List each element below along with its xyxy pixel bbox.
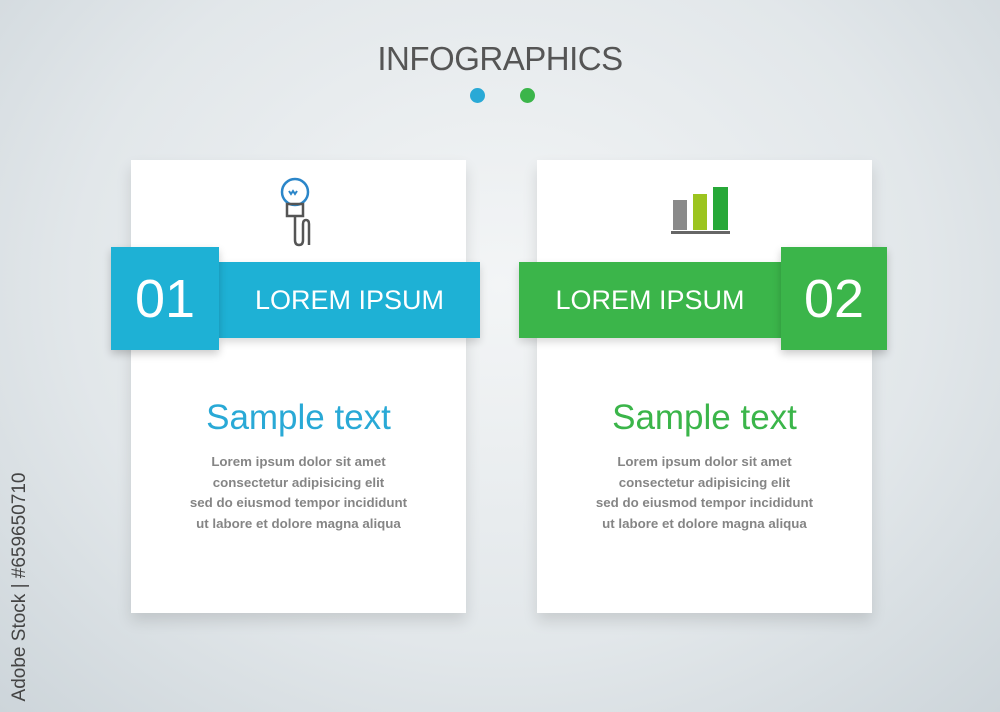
watermark id: Adobe Stock | #659650710 — [9, 473, 30, 701]
panel: card 1 — [131, 160, 466, 613]
number 01: 01 — [135, 268, 195, 328]
sample text: Sample text — [612, 398, 797, 437]
title: INFOGRAPHICS — [377, 40, 623, 77]
icon: light bulb — [280, 178, 310, 246]
number 02 — [781, 247, 887, 350]
sample text: Sample text — [206, 398, 391, 437]
ribbon 2 — [519, 262, 781, 338]
body text: Lorem ipsum dolor sit amet — [617, 454, 792, 469]
body text: sed do eiusmod tempor incididunt — [596, 495, 813, 510]
ribbon 2: LOREM IPSUM — [555, 284, 745, 314]
dots — [470, 88, 535, 103]
body text — [190, 454, 407, 530]
body text: ut labore et dolore magna aliqua — [196, 516, 401, 530]
body text: sed do eiusmod tempor incididunt — [190, 495, 407, 510]
body text: Lorem ipsum dolor sit amet — [211, 454, 386, 469]
body text — [596, 454, 813, 530]
ribbon 1: LOREM IPSUM — [255, 284, 444, 314]
body text: consectetur adipisicing elit — [213, 474, 384, 490]
number 01 — [111, 247, 219, 350]
body text: ut labore et dolore magna aliqua — [602, 516, 807, 530]
body text: consectetur adipisicing elit — [619, 474, 790, 490]
ribbon 1 — [219, 262, 480, 338]
panel: card 2 — [537, 160, 872, 613]
number 02: 02 — [804, 268, 864, 328]
icon: bar chart — [671, 187, 730, 234]
